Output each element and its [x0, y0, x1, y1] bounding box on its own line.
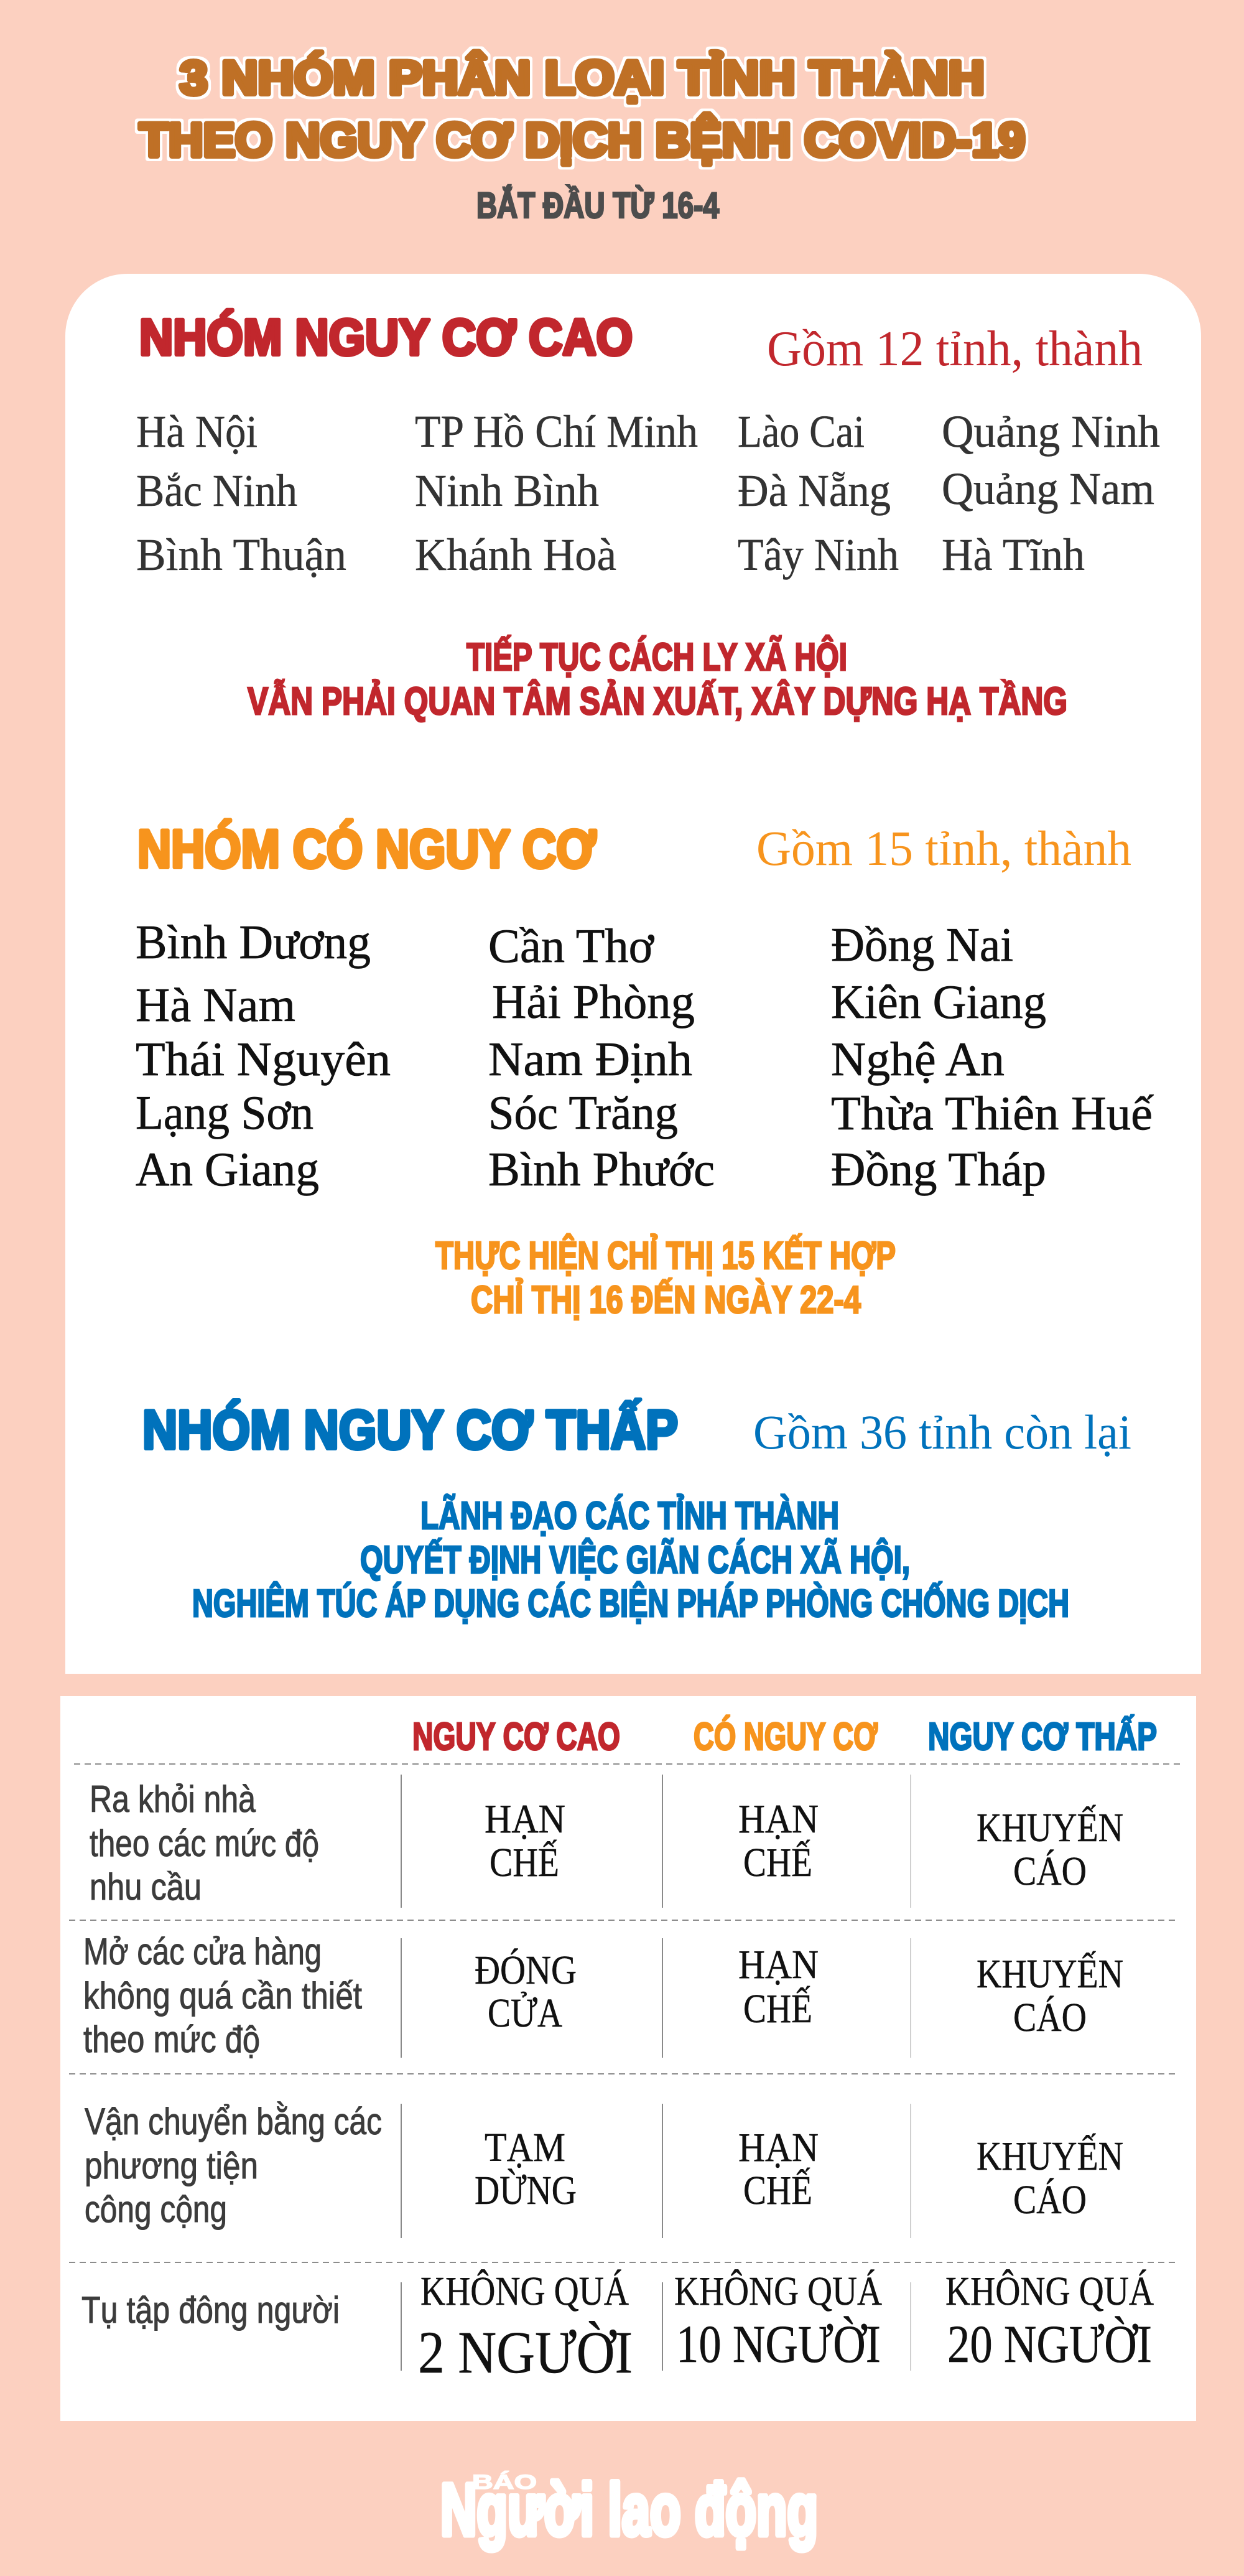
- list: at risk provinces: Hải Phòng: [492, 975, 695, 1029]
- table cells: going out: CHẾ: [743, 1839, 812, 1885]
- title: 3 NHÓM PHÂN LOẠI TỈNH THÀNH: [180, 51, 985, 105]
- list: at risk provinces: Lạng Sơn: [136, 1086, 313, 1139]
- list: high risk provinces: TP Hồ Chí Minh: [415, 406, 698, 457]
- table column headers: NGUY CƠ THẤP: [928, 1715, 1157, 1758]
- table cells: gatherings: KHÔNG QUÁ: [420, 2269, 629, 2314]
- list: high risk provinces: Hà Tĩnh: [942, 530, 1085, 580]
- row labels: theo mức độ: [83, 2018, 260, 2060]
- list: high risk provinces: Đà Nẵng: [738, 465, 891, 516]
- list: high risk provinces: Bắc Ninh: [136, 465, 297, 516]
- table cells: gatherings: KHÔNG QUÁ: [674, 2269, 882, 2314]
- table cells: shops: ĐÓNG: [475, 1948, 577, 1993]
- table column headers: [412, 1715, 1157, 1758]
- instruction: at risk group: THỰC HIỆN CHỈ THỊ 15 KẾT HỢP: [435, 1234, 896, 1277]
- list: at risk provinces: An Giang: [136, 1142, 319, 1196]
- title: THEO NGUY CƠ DỊCH BỆNH COVID-19: [139, 113, 1025, 167]
- heading: at risk group: NHÓM CÓ NGUY CƠ: [137, 819, 596, 879]
- row labels: [81, 1778, 382, 2331]
- list: at risk provinces: Thừa Thiên Huế: [831, 1086, 1154, 1140]
- table cells: public transport: [475, 2125, 1123, 2223]
- list: at risk provinces: Nghệ An: [831, 1032, 1005, 1086]
- heading: low risk group: NHÓM NGUY CƠ THẤP: [142, 1399, 678, 1460]
- row labels: không quá cần thiết: [83, 1975, 362, 2017]
- table cells: going out: KHUYẾN: [977, 1804, 1123, 1850]
- row labels: Tụ tập đông người: [81, 2289, 340, 2331]
- row labels: theo các mức độ: [90, 1822, 319, 1864]
- panel: comparison table: [60, 1696, 1196, 2421]
- instruction: low risk group: [192, 1495, 1069, 1625]
- list: at risk provinces: Kiên Giang: [831, 975, 1046, 1029]
- table cells: gatherings: KHÔNG QUÁ: [945, 2269, 1154, 2314]
- table cells: public transport: CHẾ: [743, 2167, 812, 2213]
- count: high risk group: Gồm 12 tỉnh, thành: [767, 322, 1143, 376]
- count: low risk group: Gồm 36 tỉnh còn lại: [753, 1405, 1131, 1459]
- table cells: shops: CỬA: [488, 1990, 562, 2036]
- instruction: low risk group: QUYẾT ĐỊNH VIỆC GIÃN CÁCH XÃ HỘI,: [360, 1539, 910, 1582]
- table cells: gatherings: 20 NGƯỜI: [947, 2314, 1152, 2374]
- panel: risk groups: [65, 274, 1201, 1674]
- row labels: nhu cầu: [90, 1866, 202, 1908]
- instruction: at risk group: [435, 1234, 896, 1322]
- heading: high risk group: NHÓM NGUY CƠ CAO: [139, 309, 633, 366]
- instruction: high risk group: VẪN PHẢI QUAN TÂM SẢN XUẤT, XÂY DỰNG HẠ TẦNG: [248, 680, 1067, 723]
- table cells: shops: CÁO: [1013, 1995, 1087, 2040]
- logo: Báo Người lao động: Người lao động: [440, 2469, 818, 2551]
- list: high risk provinces: [136, 406, 1160, 580]
- list: at risk provinces: Sóc Trăng: [488, 1086, 678, 1139]
- row labels: Mở các cửa hàng: [83, 1931, 322, 1972]
- list: high risk provinces: Lào Cai: [738, 406, 865, 457]
- table cells: gatherings: [418, 2269, 1154, 2386]
- list: high risk provinces: Bình Thuận: [136, 530, 346, 580]
- list: at risk provinces: Hà Nam: [136, 978, 295, 1032]
- table cells: going out: CÁO: [1013, 1849, 1087, 1894]
- list: high risk provinces: Ninh Bình: [415, 465, 599, 516]
- table cells: gatherings: 10 NGƯỜI: [676, 2314, 881, 2374]
- table cells: going out: CHẾ: [490, 1839, 559, 1885]
- instruction: low risk group: LÃNH ĐẠO CÁC TỈNH THÀNH: [420, 1495, 839, 1538]
- table cells: public transport: TẠM: [485, 2125, 565, 2170]
- list: at risk provinces: Thái Nguyên: [136, 1032, 391, 1086]
- table cells: public transport: CÁO: [1013, 2177, 1087, 2223]
- list: high risk provinces: Tây Ninh: [738, 530, 899, 580]
- list: at risk provinces: Đồng Tháp: [831, 1142, 1046, 1196]
- table cells: public transport: DỪNG: [475, 2168, 577, 2213]
- instruction: at risk group: CHỈ THỊ 16 ĐẾN NGÀY 22-4: [471, 1279, 861, 1322]
- table cells: public transport: KHUYẾN: [977, 2133, 1123, 2179]
- table cells: shops: HẠN: [738, 1942, 819, 1987]
- table column headers: NGUY CƠ CAO: [412, 1715, 620, 1758]
- list: at risk provinces: Bình Dương: [136, 915, 371, 969]
- row labels: Ra khỏi nhà: [90, 1778, 256, 1820]
- table column headers: CÓ NGUY CƠ: [694, 1715, 878, 1758]
- table cells: public transport: HẠN: [738, 2125, 819, 2170]
- list: high risk provinces: Quảng Nam: [942, 464, 1154, 514]
- table cells: shops: KHUYẾN: [977, 1951, 1123, 1997]
- row labels: Vận chuyển bằng các: [85, 2101, 382, 2142]
- instruction: high risk group: [248, 636, 1067, 723]
- instruction: high risk group: TIẾP TỤC CÁCH LY XÃ HỘI: [466, 636, 847, 679]
- row labels: công cộng: [85, 2188, 227, 2230]
- subtitle: start date: BẮT ĐẦU TỪ 16-4: [476, 185, 719, 226]
- count: at risk group: Gồm 15 tỉnh, thành: [756, 822, 1131, 876]
- title: [139, 51, 1025, 167]
- table cells: gatherings: 2 NGƯỜI: [418, 2319, 633, 2386]
- logo: Báo Người lao động: BÁO: [472, 2471, 537, 2493]
- list: high risk provinces: Quảng Ninh: [942, 406, 1160, 457]
- table cells: going out: HẠN: [738, 1796, 819, 1842]
- table cells: shops: CHẾ: [743, 1986, 812, 2032]
- list: high risk provinces: Hà Nội: [136, 406, 258, 457]
- row labels: phương tiện: [85, 2145, 258, 2186]
- table cells: going out: HẠN: [485, 1796, 565, 1842]
- list: at risk provinces: Bình Phước: [488, 1142, 715, 1196]
- list: at risk provinces: Nam Định: [488, 1032, 692, 1086]
- list: at risk provinces: [136, 915, 1154, 1196]
- table cells: going out: [485, 1796, 1123, 1894]
- logo: Báo Người lao động: [440, 2469, 818, 2551]
- table cells: shops: [475, 1942, 1123, 2040]
- list: high risk provinces: Khánh Hoà: [415, 530, 616, 580]
- list: at risk provinces: Cần Thơ: [488, 919, 654, 973]
- list: at risk provinces: Đồng Nai: [831, 918, 1013, 971]
